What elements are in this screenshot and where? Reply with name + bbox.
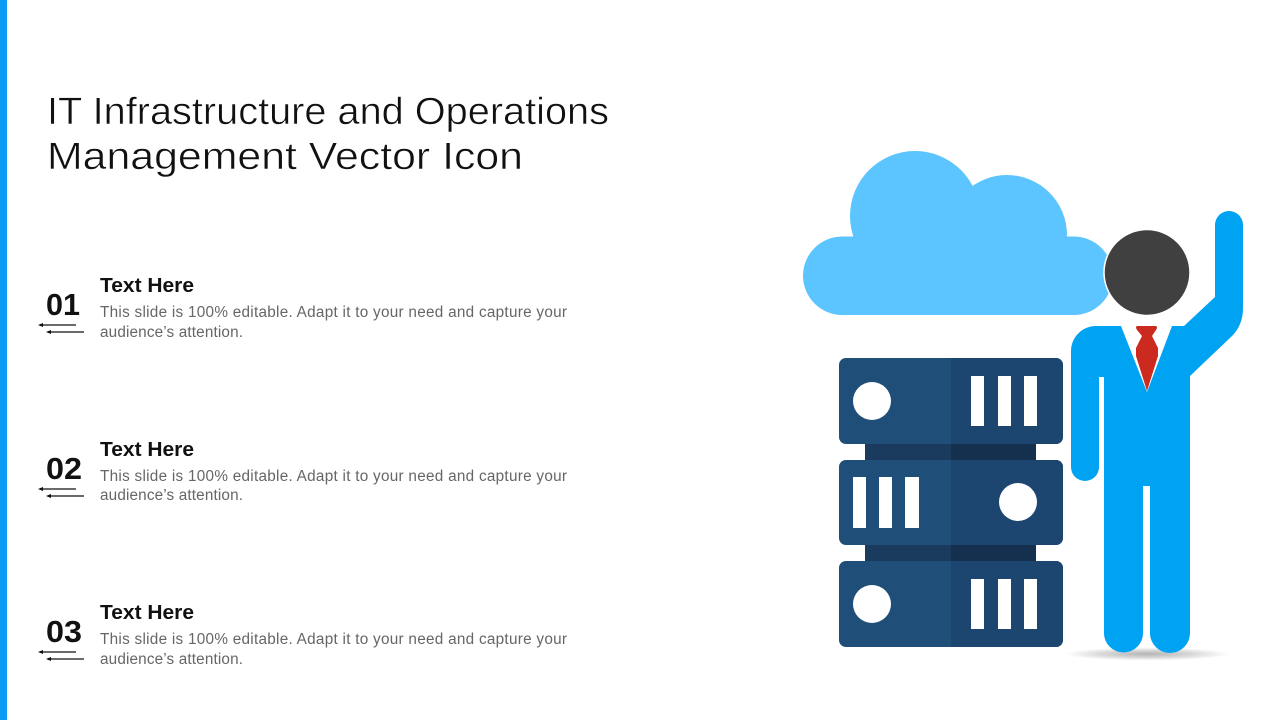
arrows 02 [38, 487, 84, 498]
heading 03: Text Here [100, 602, 194, 624]
server unit 2 [839, 460, 1063, 545]
icon: server stack [839, 358, 1063, 647]
connectors [865, 444, 1036, 561]
arrows 03 [38, 650, 84, 661]
item 01 [38, 275, 567, 341]
item 03 [38, 602, 567, 668]
head [1104, 230, 1190, 316]
icon: cloud [803, 151, 1113, 315]
tie [1136, 326, 1158, 391]
title: IT Infrastructure and Operations [47, 91, 609, 133]
description 02 [100, 468, 567, 504]
description 01: This slide is 100% editable. Adapt it to your need and capture your [100, 304, 567, 321]
description 01: audience’s attention. [100, 324, 243, 341]
description 03 [100, 631, 567, 668]
description 01 [100, 304, 567, 341]
title [47, 91, 609, 178]
title: Management Vector Icon [47, 136, 523, 178]
item 02 [38, 439, 567, 504]
number 03: 03 [46, 614, 82, 649]
accent bar [0, 0, 7, 720]
ground shadow [1065, 648, 1229, 660]
server unit 1 [839, 358, 1063, 444]
heading 02: Text Here [100, 439, 194, 461]
number 01: 01 [46, 287, 80, 322]
arrows 01 [38, 323, 84, 334]
number 02: 02 [46, 451, 82, 486]
server unit 3 [839, 561, 1063, 647]
suit body [1071, 211, 1243, 653]
description 03: audience’s attention. [100, 651, 243, 668]
heading 01: Text Here [100, 275, 194, 297]
description 02: audience’s attention. [100, 487, 243, 504]
description 03: This slide is 100% editable. Adapt it to your need and capture your [100, 631, 567, 648]
description 02: This slide is 100% editable. Adapt it to your need and capture your [100, 468, 567, 485]
icon: businessman [1065, 211, 1243, 660]
